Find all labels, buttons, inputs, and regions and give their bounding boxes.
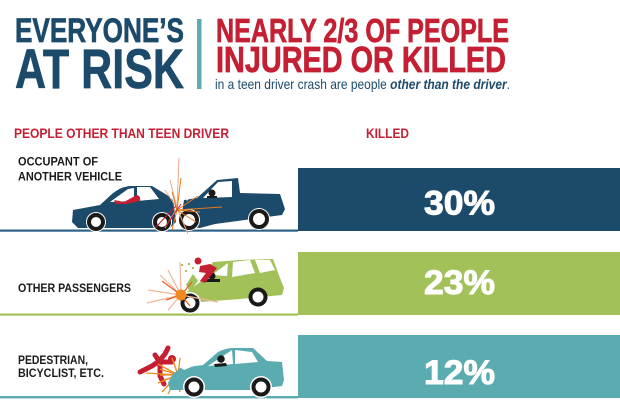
burst core (176, 290, 186, 300)
illustration: car hitting pedestrian (140, 348, 284, 398)
sedan (72, 186, 176, 228)
title: everyone's at risk: AT RISK (15, 37, 184, 100)
value: 12%: 12% (424, 354, 495, 392)
row 3: pedestrian, bicyclist (0, 335, 620, 398)
bar: 12% (298, 335, 620, 398)
hood line (181, 365, 196, 370)
baseline rule (0, 314, 298, 316)
label: pedestrian, bicyclist, etc.: PEDESTRIAN, (18, 355, 88, 367)
label: occupant of another vehicle: OCCUPANT OF (18, 156, 98, 168)
illustration: van crash (147, 258, 284, 314)
van body (180, 259, 284, 304)
value: 30%: 30% (424, 184, 495, 222)
label: occupant of another vehicle (18, 156, 122, 184)
pickup window (203, 181, 232, 198)
headline (216, 12, 509, 80)
row 1: occupant of another vehicle (0, 156, 620, 234)
van windows (212, 260, 275, 277)
wheels (86, 208, 270, 232)
title: everyone's at risk: EVERYONE’S (15, 12, 184, 50)
pickup driver (207, 190, 217, 198)
pickup (180, 178, 285, 228)
crash burst (146, 358, 180, 394)
pedestrian (140, 348, 172, 384)
label: pedestrian, bicyclist, etc.: BICYCLIST, ETC. (18, 368, 104, 380)
driver (206, 272, 220, 282)
column heading: people other than teen driver: PEOPLE OTHER THAN TEEN DRIVER (14, 125, 229, 141)
column heading: killed: KILLED (366, 125, 409, 141)
value: 23%: 23% (424, 264, 495, 302)
label: occupant of another vehicle: ANOTHER VEHICLE (18, 172, 122, 184)
wheels (183, 376, 272, 398)
bar: 23% (298, 252, 620, 315)
headline: NEARLY 2/3 OF PEOPLE (216, 12, 509, 49)
pedestrian head (168, 355, 176, 363)
baseline rule (0, 230, 298, 232)
car (168, 348, 284, 390)
van hood fragment (186, 274, 198, 292)
label: pedestrian, bicyclist, etc. (18, 355, 104, 380)
sedan occupant (114, 195, 140, 204)
car windows (208, 350, 258, 366)
crash burst (155, 158, 222, 234)
sedan windows (110, 187, 159, 202)
headline divider (197, 19, 202, 89)
debris (181, 263, 194, 272)
title: everyone's at risk (15, 12, 184, 100)
row 2: other passengers (0, 252, 620, 316)
subheadline: in a teen driver crash are people other than the driver. (215, 76, 510, 92)
wheels (179, 292, 201, 314)
driver (214, 355, 227, 367)
thrown passenger (194, 258, 217, 283)
hood fragment (182, 191, 195, 201)
headline: INJURED OR KILLED (216, 39, 506, 80)
bar: 30% (298, 168, 620, 231)
label: other passengers: OTHER PASSENGERS (18, 283, 131, 295)
illustration: sedan crashing into pickup (72, 158, 285, 234)
crash burst (147, 262, 218, 310)
baseline rule (0, 396, 298, 398)
